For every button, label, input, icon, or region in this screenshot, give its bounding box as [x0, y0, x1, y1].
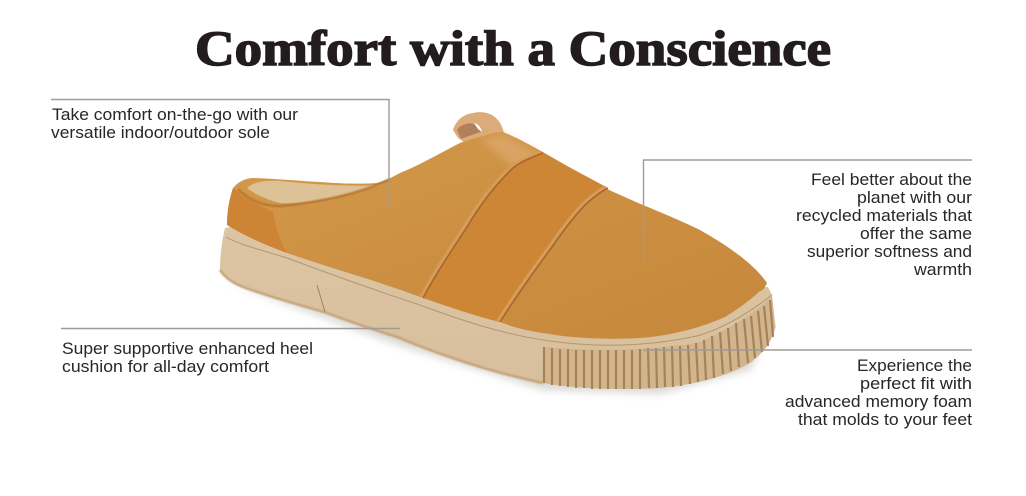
collar lining — [247, 181, 386, 203]
title: Comfort with a Conscience — [195, 20, 831, 76]
sole rim line — [226, 237, 772, 345]
callout text: planet with our — [857, 188, 972, 207]
upper highlight near strap — [480, 134, 540, 168]
callout text — [51, 105, 298, 142]
slipper upper — [227, 132, 767, 339]
callout text — [785, 356, 972, 429]
sole tread ribs — [543, 297, 775, 389]
leader line — [51, 100, 389, 205]
callout text: Take comfort on-the-go with our — [52, 105, 298, 124]
callout text: Feel better about the — [811, 170, 972, 189]
callout text — [796, 170, 972, 279]
slipper illustration — [220, 112, 775, 394]
callout: heel cushion — [61, 328, 400, 376]
heel panel — [227, 188, 287, 253]
callout: recycled materials — [644, 160, 972, 279]
pull tab — [453, 112, 504, 146]
callout: memory foam — [643, 350, 972, 429]
leader line — [61, 328, 400, 330]
callout text: perfect fit with — [860, 374, 972, 393]
callout text: Super supportive enhanced heel — [62, 339, 313, 358]
strap seams — [421, 152, 608, 322]
leader line — [643, 349, 972, 351]
callout: indoor/outdoor sole — [51, 100, 389, 205]
callout text: warmth — [913, 260, 972, 279]
sole lower edge shading — [220, 270, 543, 383]
leader line — [644, 160, 972, 261]
sole crack mark — [317, 285, 325, 312]
ground shadow — [225, 282, 760, 394]
centre strap band — [423, 153, 608, 322]
collar edge — [238, 179, 390, 206]
callout text: versatile indoor/outdoor sole — [51, 123, 270, 142]
callout text: superior softness and — [807, 242, 972, 261]
callout text — [62, 339, 313, 376]
callout text: offer the same — [860, 224, 972, 243]
callout text: that molds to your feet — [798, 410, 972, 429]
callout text: advanced memory foam — [785, 392, 972, 411]
callout text: cushion for all-day comfort — [62, 357, 269, 376]
sole — [220, 225, 775, 389]
callout text: Experience the — [857, 356, 972, 375]
callout text: recycled materials that — [796, 206, 972, 225]
